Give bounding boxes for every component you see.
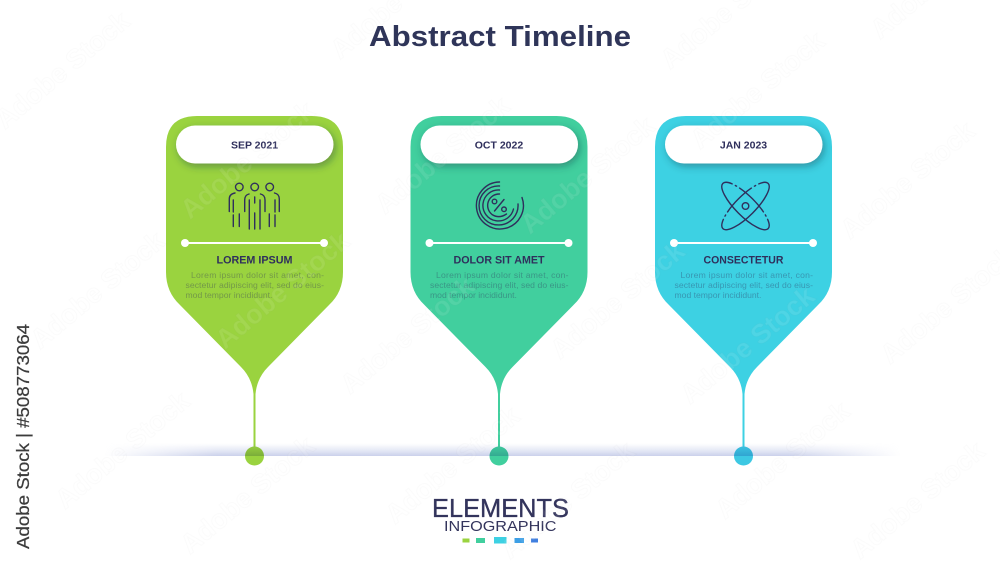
divider with end dots: [670, 239, 817, 247]
heading: DOLOR SIT AMET: [454, 254, 545, 266]
watermark pattern: Adobe Stock: [175, 430, 321, 560]
description text: mod tempor incididunt.: [430, 290, 517, 300]
heading: LOREM IPSUM: [216, 254, 292, 266]
watermark pattern: Adobe Stock: [210, 225, 356, 355]
stock credit vertical text: Adobe Stock | #508773064: [13, 324, 33, 549]
description text: mod tempor incididunt.: [186, 290, 272, 300]
logo word one: ELEMENTS: [432, 493, 569, 523]
icon: three people: [229, 183, 279, 229]
logo: Elements Infographic: [432, 493, 569, 544]
date pill: JAN 2023: [720, 140, 767, 152]
watermark pattern: Adobe Stock: [835, 115, 981, 245]
title: Abstract Timeline: [369, 21, 631, 53]
date pill: [665, 126, 822, 164]
watermark pattern: Adobe Stock: [515, 110, 661, 240]
logo word two: INFOGRAPHIC: [444, 518, 557, 535]
icon: percent radar: [476, 182, 523, 229]
date pill: [176, 126, 334, 164]
watermark pattern: Adobe Stock: [50, 385, 196, 515]
description text: Lorem ipsum dolor sit amet, con-: [680, 270, 813, 280]
watermark pattern: Adobe Stock: [685, 25, 831, 155]
panel: January 2023 marker: [655, 116, 832, 466]
watermark pattern: Adobe Stock: [710, 395, 856, 525]
timeline dot: [245, 446, 264, 466]
timeline dot: [490, 446, 508, 466]
watermark pattern: Adobe Stock: [845, 435, 991, 563]
pin shape: [410, 116, 588, 450]
description text: mod tempor incididunt.: [674, 290, 761, 300]
timeline dot: [734, 446, 753, 466]
panel: September 2021 marker: [166, 116, 343, 466]
watermark pattern: Adobe Stock: [175, 95, 321, 225]
pin shape: [655, 116, 832, 450]
description text: sectetur adipiscing elit, sed do eius-: [430, 280, 569, 290]
watermark pattern: Adobe Stock: [370, 90, 516, 220]
description text: [430, 270, 569, 300]
panel: October 2022 marker: [410, 116, 588, 466]
description text: Lorem ipsum dolor sit amet, con-: [191, 270, 324, 280]
description text: Lorem ipsum dolor sit amet, con-: [436, 270, 569, 280]
logo colour squares: [462, 537, 538, 544]
heading: CONSECTETUR: [704, 254, 784, 266]
date pill: [420, 126, 578, 164]
watermark pattern: Adobe Stock: [545, 235, 691, 365]
description text: sectetur adipiscing elit, sed do eius-: [674, 280, 813, 290]
watermark pattern: Adobe Stock: [495, 435, 641, 563]
icon: atom: [716, 176, 775, 236]
timeline axis band: [123, 446, 882, 456]
date pill: OCT 2022: [475, 140, 523, 152]
watermark pattern: Adobe Stock: [335, 270, 481, 400]
description text: [674, 270, 813, 300]
description text: sectetur adipiscing elit, sed do eius-: [186, 280, 324, 290]
divider with end dots: [426, 239, 572, 247]
watermark pattern: Adobe Stock: [380, 400, 526, 530]
description text: [186, 270, 324, 300]
watermark pattern: Adobe Stock: [25, 225, 171, 355]
pin shape: [166, 116, 343, 450]
date pill: SEP 2021: [231, 140, 278, 152]
divider with end dots: [181, 239, 328, 247]
watermark pattern: Adobe Stock: [675, 280, 821, 410]
